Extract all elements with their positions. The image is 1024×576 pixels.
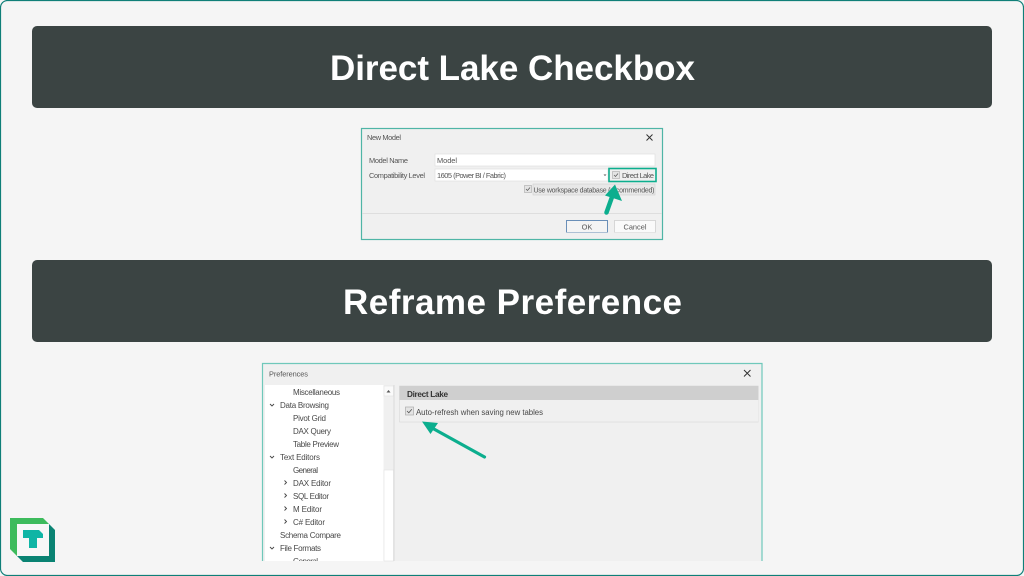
navigation tree: Pivot Grid <box>293 414 326 423</box>
navigation tree: DAX Query <box>293 427 331 436</box>
navigation tree: SQL Editor <box>293 492 329 501</box>
navigation tree: Text Editors <box>280 453 320 462</box>
navigation tree: General <box>293 557 318 566</box>
navigation tree: Data Browsing <box>280 401 329 410</box>
checkbox: use workspace database: Use workspace database (recommended) <box>534 188 654 194</box>
navigation tree: Table Preview <box>293 440 339 449</box>
checkbox: auto-refresh: Auto-refresh when saving new tables <box>416 408 543 417</box>
heading: Reframe Preference: Reframe Preference <box>343 283 682 322</box>
panel: Preferences dialog screenshot <box>262 363 762 566</box>
navigation tree: C# Editor <box>293 518 325 527</box>
section heading: Direct Lake <box>407 390 448 399</box>
arrow: to auto-refresh checkbox <box>422 422 484 457</box>
highlight box around Direct Lake <box>609 168 656 182</box>
navigation tree: M Editor <box>293 505 322 514</box>
navigation tree <box>265 385 394 566</box>
arrow: to Direct Lake checkbox <box>605 184 622 212</box>
field label: model name: Model Name <box>369 156 408 165</box>
icon: close button <box>646 134 652 140</box>
dropdown: compatibility level: 1605 (Power BI / Fabric) <box>437 171 506 180</box>
navigation tree: Schema Compare <box>280 531 342 540</box>
icon: close button <box>744 370 750 376</box>
input: model name: Model <box>437 156 457 165</box>
heading: Reframe Preference <box>32 260 992 342</box>
input: model name <box>435 154 655 166</box>
navigation tree: General <box>293 466 318 475</box>
panel: New Model dialog screenshot <box>362 128 662 240</box>
dialog title: Preferences <box>269 370 308 378</box>
button: Cancel: Cancel <box>623 222 647 232</box>
button: OK <box>566 220 608 232</box>
button: Cancel <box>614 220 656 232</box>
divider <box>362 213 662 214</box>
dialog title: New Model <box>367 133 401 142</box>
navigation tree: DAX Editor <box>293 479 331 488</box>
button: OK: OK <box>582 222 592 232</box>
logo letter T <box>23 530 43 548</box>
section: Direct Lake settings <box>400 386 758 422</box>
field label: compatibility level: Compatibility Level <box>369 171 425 180</box>
dropdown: compatibility level <box>435 169 608 181</box>
logo <box>10 518 55 562</box>
heading: Direct Lake Checkbox <box>32 26 992 108</box>
heading: Direct Lake Checkbox: Direct Lake Checkbox <box>330 49 696 88</box>
navigation tree: Miscellaneous <box>293 388 340 397</box>
checkbox: use workspace database <box>524 184 655 195</box>
navigation tree: File Formats <box>280 544 321 553</box>
checkbox: Direct Lake: Direct Lake <box>622 171 654 180</box>
